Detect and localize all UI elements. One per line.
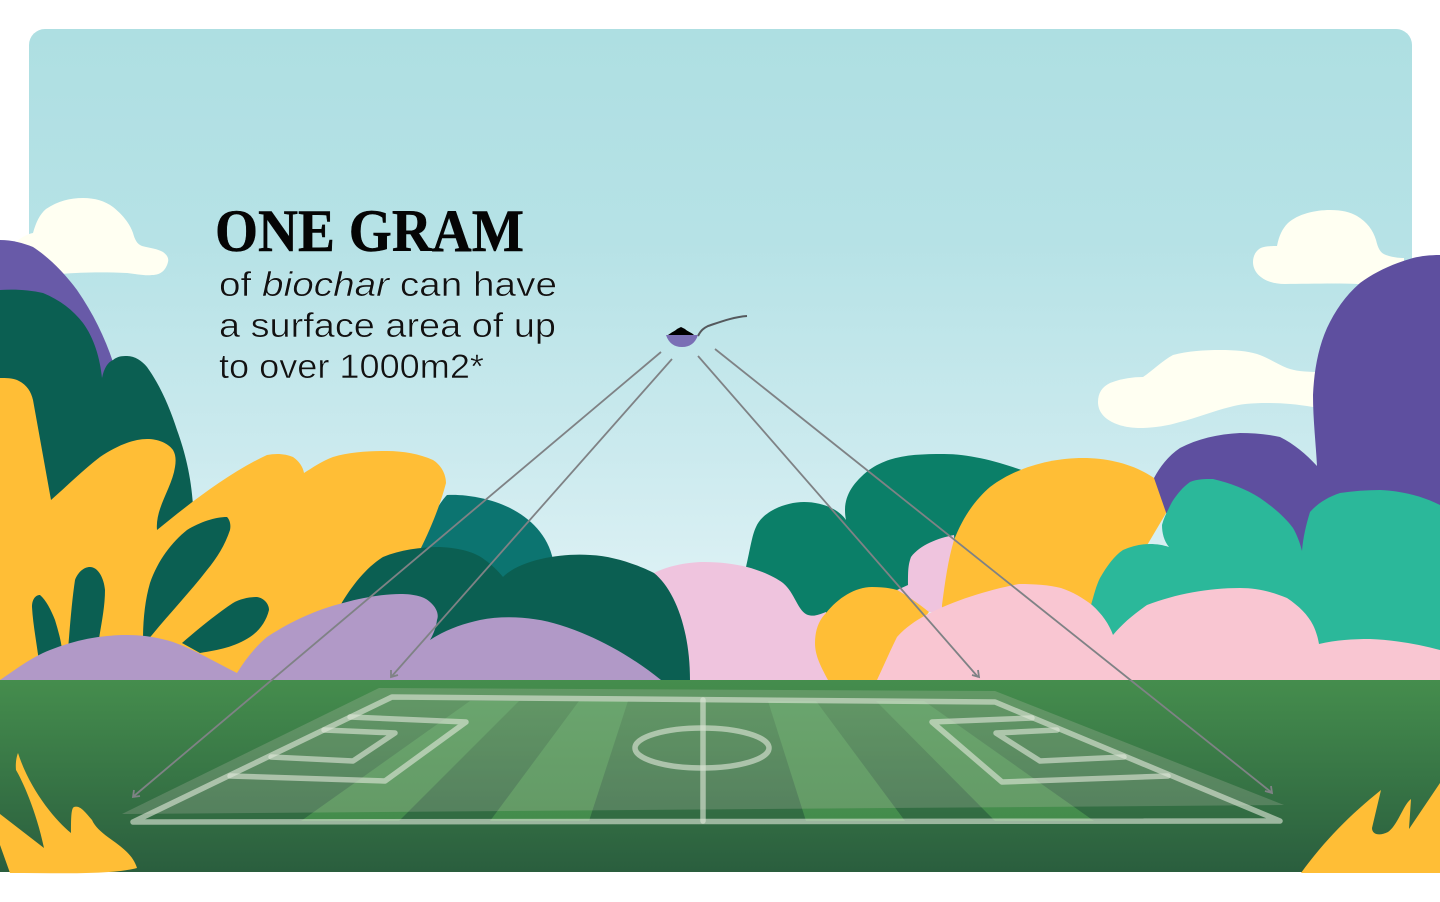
arrow: far right — [715, 349, 1272, 793]
foliage: left dark green bush — [0, 290, 193, 640]
grass tuft: bottom right — [1301, 783, 1440, 873]
foliage: right back teal bush — [746, 454, 1024, 620]
foliage: right pink bush — [877, 584, 1440, 680]
foliage: left purple bush — [0, 240, 115, 400]
grass field — [0, 680, 1440, 872]
foliage: pale pink bush behind yellow — [897, 535, 960, 612]
heading: one gram: ONE GRAM — [215, 198, 524, 264]
foliage: left yellow bush — [0, 378, 446, 680]
foliage: right yellow bush — [942, 458, 1172, 625]
grass tuft: bottom left — [0, 753, 137, 873]
arrow: far left — [133, 352, 661, 797]
arrows: spoon to pitch corners — [133, 349, 1272, 797]
text block: biochar description: of biochar can have — [219, 266, 557, 304]
foliage: centre dark green bush — [340, 547, 690, 680]
foliage: right purple bush — [1154, 255, 1440, 610]
foliage: centre pink bush — [654, 562, 850, 680]
arrow: inner left — [391, 359, 672, 677]
foliage: lilac mounds — [0, 594, 661, 680]
foliage: left teal bush — [415, 495, 553, 610]
pitch shadow plane — [122, 688, 1284, 814]
pitch markings — [133, 697, 1280, 822]
cloud: middle right — [1098, 350, 1320, 428]
arrow: inner right — [698, 356, 979, 677]
icon: spoon with biochar — [666, 316, 747, 347]
cloud: top right — [1253, 210, 1404, 284]
cloud: top left — [14, 198, 168, 275]
foliage: leaves on yellow bush — [32, 517, 269, 662]
text block: biochar description — [219, 266, 557, 386]
foliage: right teal bush — [1091, 479, 1440, 660]
pitch stripes — [301, 701, 1094, 821]
football pitch — [122, 688, 1284, 822]
foliage: small yellow bush — [815, 587, 929, 680]
text block: biochar description: to over 1000m2* — [219, 348, 484, 386]
text block: biochar description: a surface area of up — [219, 307, 556, 345]
